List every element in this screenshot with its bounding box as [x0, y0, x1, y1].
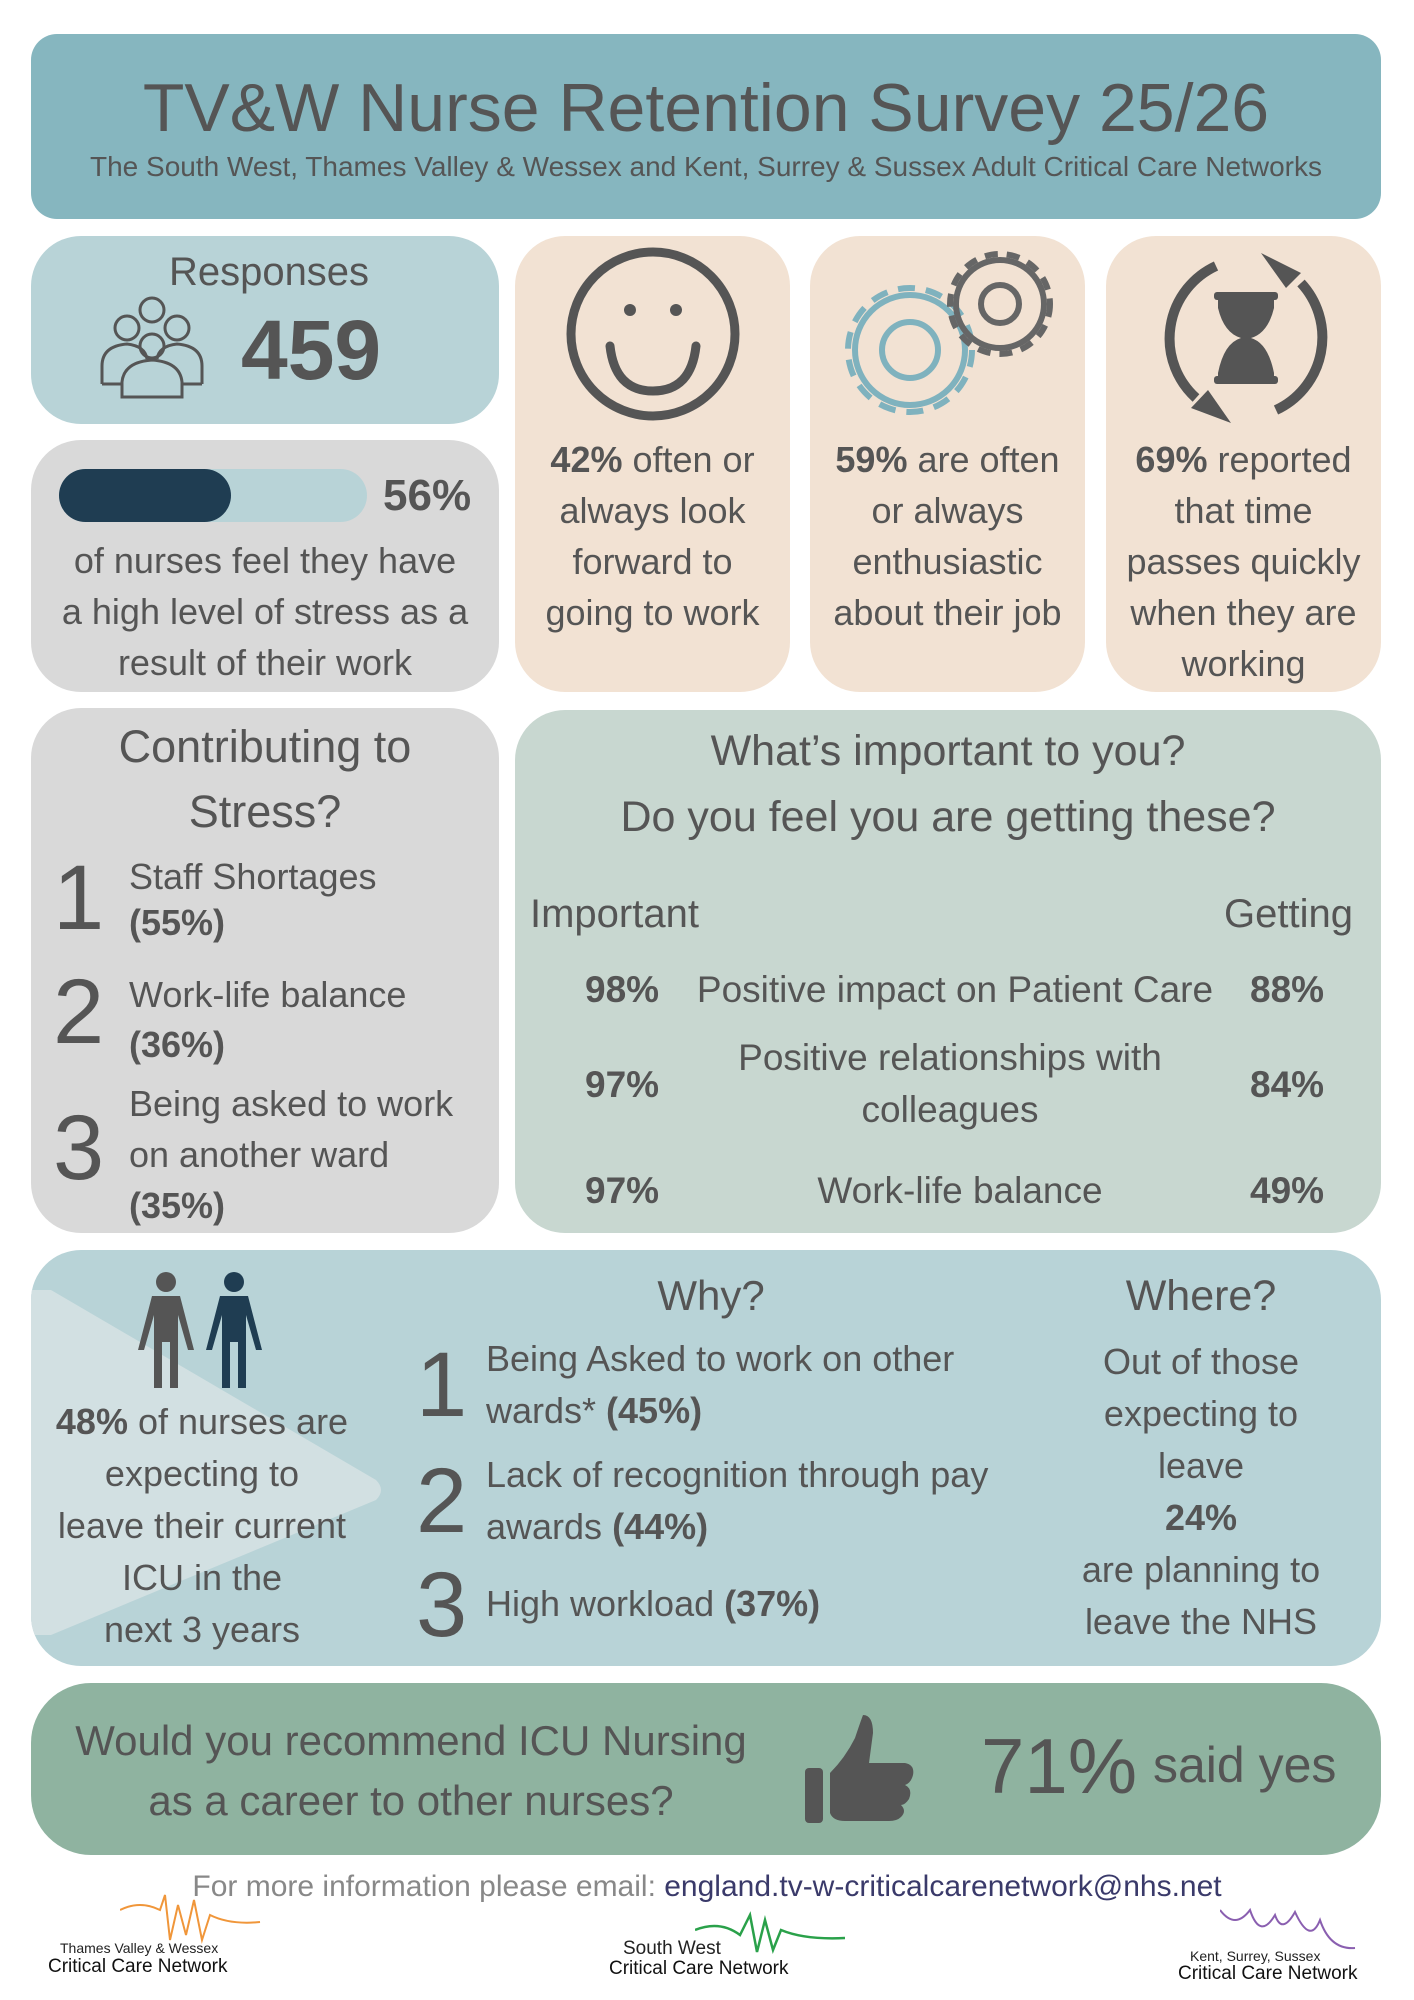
stat text — [833, 439, 1062, 633]
row: work-life balance: Work-life balance — [817, 1170, 1103, 1211]
row: relationships: Positive relationships with — [738, 1037, 1162, 1078]
where text: 24% — [1165, 1497, 1237, 1538]
row: work-life balance: 49% — [1250, 1170, 1324, 1211]
stat text: 42% often or — [550, 439, 755, 480]
item 1: Staff Shortages — [129, 856, 376, 897]
stat text: forward to — [572, 541, 733, 582]
stress description: of nurses feel they have — [74, 540, 456, 581]
stat text: when they are — [1130, 592, 1357, 633]
why item 1: 1 — [416, 1334, 467, 1436]
item 2 — [53, 961, 406, 1065]
icon: smiley face — [566, 248, 740, 420]
logo: kent surrey sussex — [1178, 1908, 1358, 1984]
icon: gears — [845, 251, 1053, 415]
panel: responses — [31, 236, 499, 424]
panel: contributing to stress — [31, 708, 499, 1233]
why heading: Why? — [657, 1272, 765, 1319]
item 2: Work-life balance — [129, 974, 406, 1015]
where text: leave — [1158, 1445, 1244, 1486]
why item 3: 3 — [416, 1554, 467, 1656]
item 1: (55%) — [129, 902, 225, 943]
stat text: 69% reported — [1135, 439, 1352, 480]
leaving stat text — [56, 1401, 348, 1650]
stat text: or always — [871, 490, 1024, 531]
row: relationships — [585, 1037, 1324, 1130]
item 2: 2 — [53, 961, 104, 1063]
panel: stress level — [31, 440, 499, 692]
header banner — [31, 34, 1381, 219]
item 3 — [53, 1083, 454, 1226]
item 2: (36%) — [129, 1024, 225, 1065]
item 3: Being asked to work — [129, 1083, 453, 1124]
stat text: passes quickly — [1126, 541, 1361, 582]
stat text — [545, 439, 760, 633]
leaving stat text: next 3 years — [104, 1609, 300, 1650]
progress bar — [59, 469, 367, 522]
logo: kent surrey sussex: Kent, Surrey, Sussex — [1190, 1948, 1320, 1964]
leaving stat text: expecting to — [105, 1453, 299, 1494]
row: work-life balance: 97% — [585, 1170, 659, 1211]
leaving stat text: 48% of nurses are — [56, 1401, 348, 1442]
stress description: result of their work — [118, 642, 412, 683]
where text: expecting to — [1104, 1393, 1298, 1434]
where text: Out of those — [1103, 1341, 1299, 1382]
panel: time passes quickly — [1106, 236, 1381, 692]
where text — [1082, 1341, 1320, 1642]
row: work-life balance — [585, 1170, 1324, 1211]
heading — [620, 727, 1276, 841]
logo: thames valley & wessex — [48, 1894, 260, 1977]
where heading: Where? — [1126, 1272, 1276, 1320]
why item 1 — [416, 1334, 954, 1436]
row: relationships: colleagues — [862, 1089, 1038, 1130]
where text: are planning to — [1082, 1549, 1320, 1590]
stat text — [1126, 439, 1361, 684]
stat text: always look — [559, 490, 746, 531]
logo: south west: South West — [623, 1938, 721, 1959]
footer: contact email: For more information please email: england.tv-w-criticalcarenetwork@nhs.net — [192, 1870, 1222, 1903]
stat text: 59% are often — [835, 439, 1060, 480]
heading: Stress? — [189, 786, 341, 837]
why item 2 — [416, 1450, 988, 1552]
why item 2: 2 — [416, 1450, 467, 1552]
responses label: Responses — [169, 250, 369, 294]
panel: expecting to leave — [31, 1250, 1381, 1666]
heading: Do you feel you are getting these? — [620, 793, 1276, 841]
icon: hourglass with arrows — [1164, 253, 1328, 423]
leaving stat text: ICU in the — [122, 1557, 282, 1598]
where text: leave the NHS — [1085, 1601, 1317, 1642]
panel: look forward to work — [515, 236, 790, 692]
stress description: a high level of stress as a — [62, 591, 468, 632]
row: patient care: Positive impact on Patient Care — [697, 969, 1213, 1010]
why item 2: Lack of recognition through pay — [486, 1454, 988, 1495]
decorative arrow shape — [31, 1290, 381, 1635]
column labels: Important — [530, 892, 699, 936]
stat text: enthusiastic — [852, 541, 1043, 582]
why item 2: awards (44%) — [486, 1506, 708, 1547]
panel: recommend ICU nursing — [31, 1683, 1381, 1855]
row: relationships: 84% — [1250, 1064, 1324, 1105]
heading: What’s important to you? — [711, 727, 1185, 775]
panel: what's important: Getting — [1224, 892, 1353, 936]
stat text: working — [1181, 643, 1306, 684]
leaving stat text: leave their current — [58, 1505, 346, 1546]
why item 3 — [416, 1554, 820, 1656]
panel: enthusiastic — [810, 236, 1085, 692]
row: patient care: 98% — [585, 969, 659, 1010]
heading: Contributing to — [119, 721, 411, 772]
heading — [119, 721, 411, 837]
panel: what's important — [515, 710, 1381, 1233]
title: TV&W Nurse Retention Survey 25/26 — [143, 70, 1269, 146]
stress description — [62, 540, 468, 683]
item 3: 3 — [53, 1097, 104, 1199]
item 3: (35%) — [129, 1185, 225, 1226]
question text — [75, 1717, 747, 1824]
item 1: 1 — [53, 847, 104, 949]
item 1 — [53, 847, 376, 949]
said yes: said yes — [1153, 1737, 1336, 1793]
row: patient care: 88% — [1250, 969, 1324, 1010]
icon: thumbs up — [805, 1715, 914, 1823]
stat 71%: 71% — [981, 1722, 1137, 1810]
stat text: going to work — [545, 592, 760, 633]
logo: thames valley & wessex: Thames Valley & Wessex — [60, 1940, 218, 1956]
question text: as a career to other nurses? — [148, 1777, 674, 1824]
row: relationships: 97% — [585, 1064, 659, 1105]
icon: two people — [138, 1272, 262, 1388]
subtitle: The South West, Thames Valley & Wessex and Kent, Surrey & Sussex Adult Critical Care Networks — [90, 151, 1322, 182]
why item 1: wards* (45%) — [486, 1390, 702, 1431]
logo: south west — [609, 1911, 845, 1979]
why item 1: Being Asked to work on other — [486, 1338, 954, 1379]
icon: group of people — [100, 296, 204, 398]
stat 56%: 56% — [383, 471, 471, 520]
responses number: 459 — [241, 303, 381, 397]
row: patient care — [585, 969, 1324, 1010]
stat text: about their job — [833, 592, 1062, 633]
item 3: on another ward — [129, 1134, 389, 1175]
question text: Would you recommend ICU Nursing — [75, 1717, 747, 1764]
logo: south west: Critical Care Network — [609, 1958, 788, 1979]
why item 3: High workload (37%) — [486, 1583, 820, 1624]
logo: kent surrey sussex: Critical Care Network — [1178, 1963, 1357, 1984]
stat text: that time — [1174, 490, 1313, 531]
logo: thames valley & wessex: Critical Care Network — [48, 1956, 227, 1977]
